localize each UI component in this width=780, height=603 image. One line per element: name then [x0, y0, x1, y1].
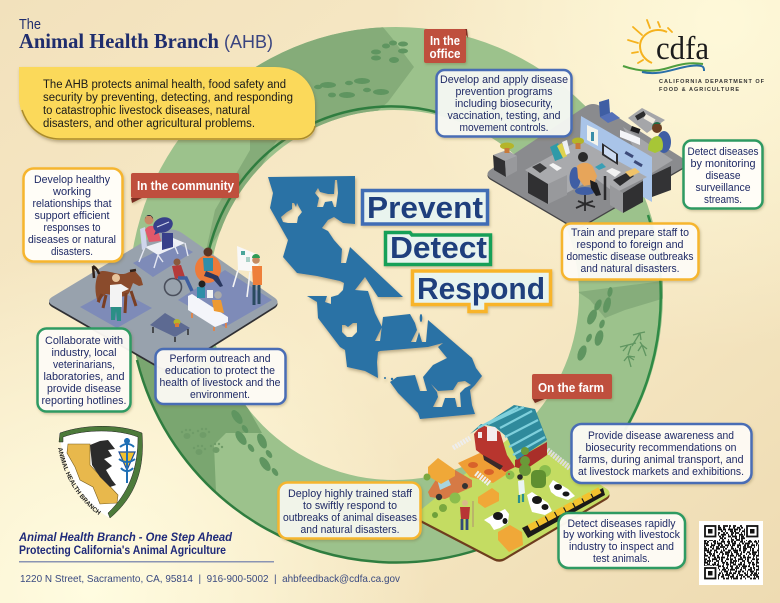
callout: develop relationships: working: [52, 186, 91, 198]
on the farm label: On the farm: [538, 381, 604, 395]
truck: [428, 470, 472, 499]
intro banner: security by preventing, detecting, and responding: [43, 92, 293, 104]
Detect word: Detect: [390, 230, 487, 265]
farm illustration: [415, 405, 610, 562]
callout: outreach: health of livestock and the: [160, 377, 280, 389]
cows: [484, 480, 575, 530]
callout: train staff: [562, 224, 698, 280]
Respond word: Respond: [417, 271, 545, 306]
hay bales: [428, 458, 455, 484]
callout: deploy staff: Deploy highly trained staff: [288, 488, 413, 500]
callout: prevention programs: movement controls.: [460, 122, 548, 134]
callout: train staff: Train and prepare staff to: [571, 227, 689, 239]
callout: outreach: Perform outreach and: [170, 353, 270, 365]
callout: train staff: and natural disasters.: [580, 263, 680, 275]
trees: [450, 492, 460, 504]
callout: develop relationships: [24, 168, 122, 262]
AHB shield logo: ANIMAL HEALTH BRANCH: [58, 448, 101, 515]
horse and vet: [95, 270, 143, 303]
cdfa logo: FOOD & AGRICULTURE: [659, 87, 739, 93]
callout: surveillance: disease: [706, 170, 740, 182]
callout: awareness: biosecurity recommendations on: [586, 442, 736, 454]
callout: outreach: [156, 349, 286, 404]
title: The: [19, 16, 41, 33]
callout: develop relationships: Develop healthy: [34, 174, 110, 186]
callout: detect rapidly: Detect diseases rapidly: [568, 518, 676, 530]
Prevent word: Prevent: [367, 190, 483, 225]
in the office label: office: [430, 47, 461, 61]
tagline: [18, 530, 233, 557]
callout: train staff: respond to foreign and: [576, 239, 684, 251]
partition: [580, 116, 652, 202]
contact line: 1220 N Street, Sacramento, CA, 95814 | 916-900-5002 | ahbfeedback@cdfa.ca.gov: [20, 573, 401, 585]
intro banner: to catastrophic livestock diseases, natural: [43, 105, 250, 117]
callout: collaborate: laboratories, and: [44, 371, 124, 383]
callout: surveillance: streams.: [704, 194, 742, 206]
tagline: Animal Health Branch - One Step Ahead: [18, 530, 233, 544]
callout: deploy staff: to swiftly respond to: [303, 500, 397, 512]
desks: [525, 140, 647, 195]
callout: develop relationships: responses to: [44, 222, 100, 234]
callout: collaborate: [38, 328, 130, 412]
callout: awareness: [572, 424, 752, 483]
intro banner: The AHB protects animal health, food safety and: [43, 79, 286, 91]
cdfa logo: CALIFORNIA DEPARTMENT OF: [659, 79, 765, 85]
farm ground: [415, 435, 610, 562]
callout: deploy staff: [278, 482, 420, 538]
callout: awareness: Provide disease awareness and: [588, 430, 734, 442]
callout: prevention programs: prevention programs: [456, 86, 553, 98]
callout: deploy staff: outbreaks of animal diseases: [283, 512, 417, 524]
callout: surveillance: by monitoring: [690, 158, 756, 170]
callout: surveillance: [684, 140, 762, 208]
footprints: [229, 40, 613, 477]
tagline: Protecting California's Animal Agriculture: [19, 545, 226, 557]
QR code: [699, 521, 763, 585]
in the office label: In the: [430, 34, 460, 48]
callout: deploy staff: and natural disasters.: [300, 524, 400, 536]
callout: develop relationships: support efficient: [34, 210, 110, 222]
callout: prevention programs: including biosecurity,: [455, 98, 553, 110]
callout: collaborate: industry, local: [52, 347, 116, 359]
cdfa logo: [623, 20, 765, 93]
callout: train staff: domestic disease outbreaks: [566, 251, 694, 263]
callout: collaborate: provide disease: [47, 383, 121, 395]
office illustration: [488, 99, 686, 229]
Prevent Detect Respond heading: [362, 190, 550, 312]
callout: surveillance: Detect diseases: [688, 146, 759, 158]
community illustration: [49, 215, 278, 372]
title: Animal Health Branch: [19, 29, 219, 53]
callout: awareness: farms, during animal transport, and: [578, 454, 744, 466]
office floor: [488, 106, 686, 229]
vet and farmer: [518, 480, 525, 495]
cdfa logo: cdfa: [656, 31, 709, 67]
green ring path: [120, 20, 670, 570]
desk and operator: [145, 238, 185, 255]
callout: prevention programs: [436, 70, 572, 136]
callout: collaborate: reporting hotlines.: [42, 395, 126, 407]
title: (AHB): [224, 32, 273, 52]
in the community label: [131, 173, 239, 203]
callout: outreach: education to protect the: [165, 365, 275, 377]
on the farm label: [532, 374, 612, 403]
callout: detect rapidly: industry to inspect and: [569, 541, 674, 553]
paw prints: [181, 428, 223, 455]
wheelchair user: [164, 278, 182, 296]
title: [19, 16, 273, 53]
callout: collaborate: veterinarians,: [53, 359, 115, 371]
callout: prevention programs: Develop and apply disease: [440, 74, 568, 86]
barn: [474, 425, 515, 472]
feed trough: [522, 488, 605, 538]
California map with animal cutouts: [268, 176, 482, 419]
coffee table: [150, 313, 190, 337]
silage and bushes: [521, 447, 529, 455]
callout: surveillance: surveillance: [696, 182, 750, 194]
beanbag woman: [195, 255, 221, 283]
callout: collaborate: Collaborate with: [45, 335, 123, 347]
sofa: [188, 294, 228, 327]
seated worker: [570, 167, 580, 189]
flip chart and presenter: [237, 246, 259, 272]
bird tracks: [620, 332, 647, 367]
callout: awareness: at livestock markets and exhibitions.: [578, 466, 744, 478]
callout: prevention programs: vaccination, testing, and: [448, 110, 560, 122]
callout: develop relationships: relationships that: [32, 198, 112, 210]
callout: detect rapidly: [558, 513, 685, 568]
AHB shield logo: [58, 426, 143, 518]
callout: detect rapidly: test animals.: [593, 553, 650, 565]
callout: detect rapidly: by working with livestock: [563, 529, 680, 541]
community floor: [49, 231, 278, 372]
callout: develop relationships: diseases or natural: [28, 234, 116, 246]
intro banner: disasters, and other agricultural problems.: [43, 118, 255, 130]
in the community label: In the community: [137, 179, 234, 193]
in the office label: [424, 29, 468, 63]
callout: outreach: environment.: [190, 389, 250, 401]
callout: develop relationships: disasters.: [51, 246, 93, 258]
intro banner: [19, 67, 315, 140]
